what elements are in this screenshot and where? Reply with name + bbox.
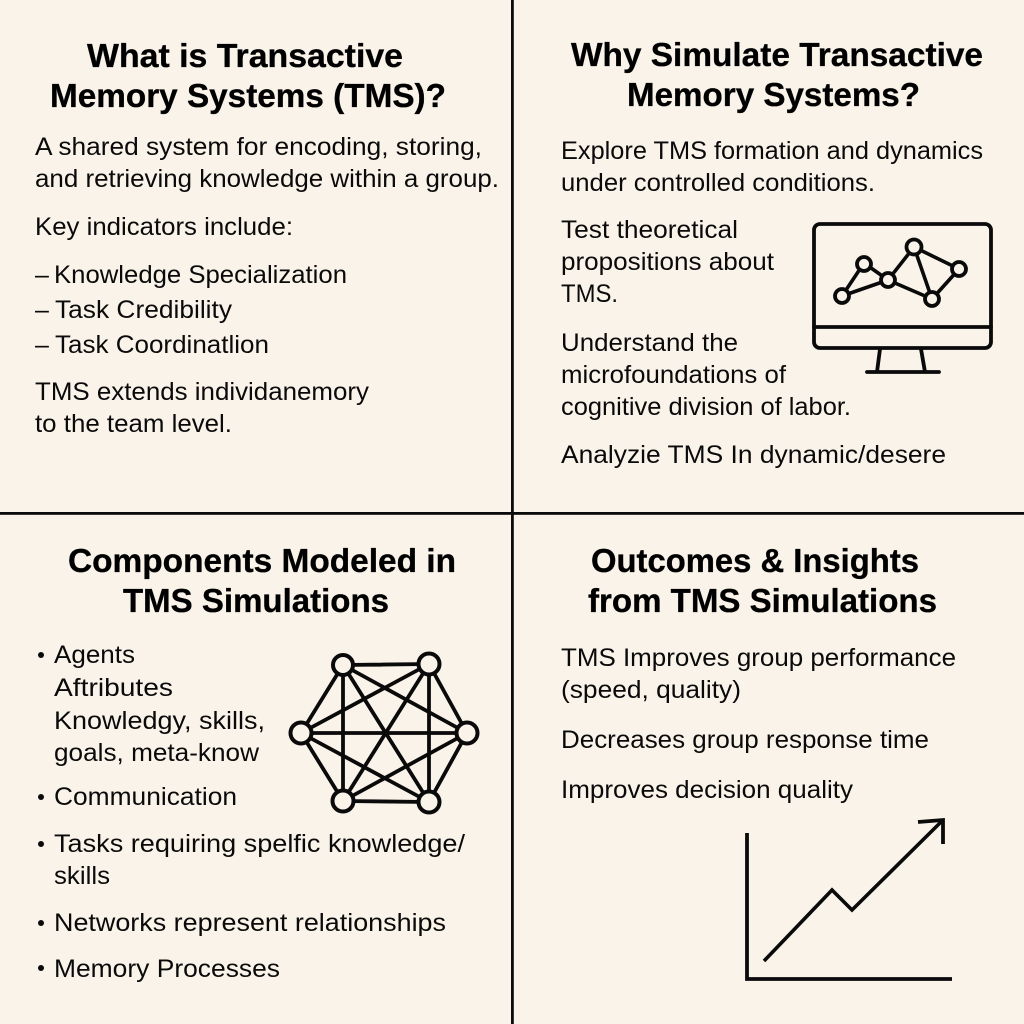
text block: reasons to simulate: TMS. bbox=[561, 280, 618, 308]
icon: computer monitor with network bbox=[814, 224, 991, 372]
text block: reasons to simulate: Explore TMS formation and dynamics bbox=[561, 137, 983, 165]
heading: components modeled bbox=[68, 542, 456, 619]
heading: what is TMS bbox=[50, 37, 446, 114]
chart: rising line with arrow bbox=[747, 820, 952, 979]
text block: definition and indicators: Key indicators include: bbox=[35, 213, 293, 241]
text block: definition and indicators: Knowledge Specialization bbox=[54, 261, 347, 289]
text block: reasons to simulate bbox=[561, 137, 983, 469]
bullet list: model components: Tasks requiring spelfic knowledge/ bbox=[54, 830, 465, 858]
bullet list: model components: Aftributes bbox=[54, 674, 173, 702]
text block: reasons to simulate: microfoundations of bbox=[561, 361, 786, 389]
text block: definition and indicators: – bbox=[35, 296, 49, 324]
bullet list: model components: Agents bbox=[54, 641, 135, 669]
heading: why simulate: Memory Systems? bbox=[627, 76, 920, 113]
text block: definition and indicators: TMS extends individanemory bbox=[35, 378, 370, 406]
panel: outcomes and insights bbox=[561, 542, 956, 979]
bullet list: model components: skills bbox=[54, 862, 110, 890]
heading: components modeled: Components Modeled in bbox=[68, 542, 456, 579]
heading: outcomes and insights: from TMS Simulations bbox=[588, 582, 937, 619]
text block: outcomes: Improves decision quality bbox=[561, 776, 854, 804]
text block: outcomes bbox=[561, 644, 956, 804]
text block: definition and indicators: – bbox=[35, 261, 49, 289]
text block: outcomes: (speed, quality) bbox=[561, 676, 741, 704]
text block: reasons to simulate: cognitive division of labor. bbox=[561, 393, 851, 421]
heading: why simulate bbox=[571, 36, 983, 113]
bullet list: model components: Communication bbox=[54, 783, 237, 811]
text block: reasons to simulate: Analyzie TMS In dynamic/desere bbox=[561, 441, 946, 469]
text block: definition and indicators bbox=[35, 133, 499, 438]
text block: reasons to simulate: under controlled conditions. bbox=[561, 169, 875, 197]
text block: definition and indicators: A shared system for encoding, storing, bbox=[35, 133, 482, 161]
text block: definition and indicators: to the team level. bbox=[35, 410, 232, 438]
bullet list: model components bbox=[38, 641, 465, 983]
text block: outcomes: TMS Improves group performance bbox=[561, 644, 956, 672]
icon: fully connected network bbox=[290, 654, 478, 812]
heading: what is TMS: What is Transactive bbox=[87, 37, 403, 74]
text block: outcomes: Decreases group response time bbox=[561, 726, 929, 754]
panel: components modeled bbox=[38, 542, 478, 983]
text block: reasons to simulate: Test theoretical bbox=[561, 216, 738, 244]
panel: why simulate bbox=[561, 36, 991, 469]
text block: reasons to simulate: Understand the bbox=[561, 329, 738, 357]
text block: reasons to simulate: propositions about bbox=[561, 248, 774, 276]
text block: definition and indicators: and retrieving knowledge within a group. bbox=[35, 165, 499, 193]
bullet list: model components: goals, meta-know bbox=[54, 739, 260, 767]
panel: what is TMS bbox=[35, 37, 499, 438]
text block: definition and indicators: Task Credibility bbox=[55, 296, 233, 324]
bullet list: model components: Knowledgy, skills, bbox=[54, 707, 265, 735]
text block: definition and indicators: Task Coordinatlion bbox=[55, 331, 269, 359]
heading: components modeled: TMS Simulations bbox=[123, 582, 389, 619]
heading: why simulate: Why Simulate Transactive bbox=[571, 36, 983, 73]
heading: what is TMS: Memory Systems (TMS)? bbox=[50, 77, 446, 114]
bullet list: model components: Networks represent relationships bbox=[54, 909, 446, 937]
bullet list: model components: Memory Processes bbox=[54, 955, 280, 983]
text block: definition and indicators: – bbox=[35, 331, 49, 359]
heading: outcomes and insights bbox=[588, 542, 937, 619]
heading: outcomes and insights: Outcomes & Insights bbox=[591, 542, 919, 579]
